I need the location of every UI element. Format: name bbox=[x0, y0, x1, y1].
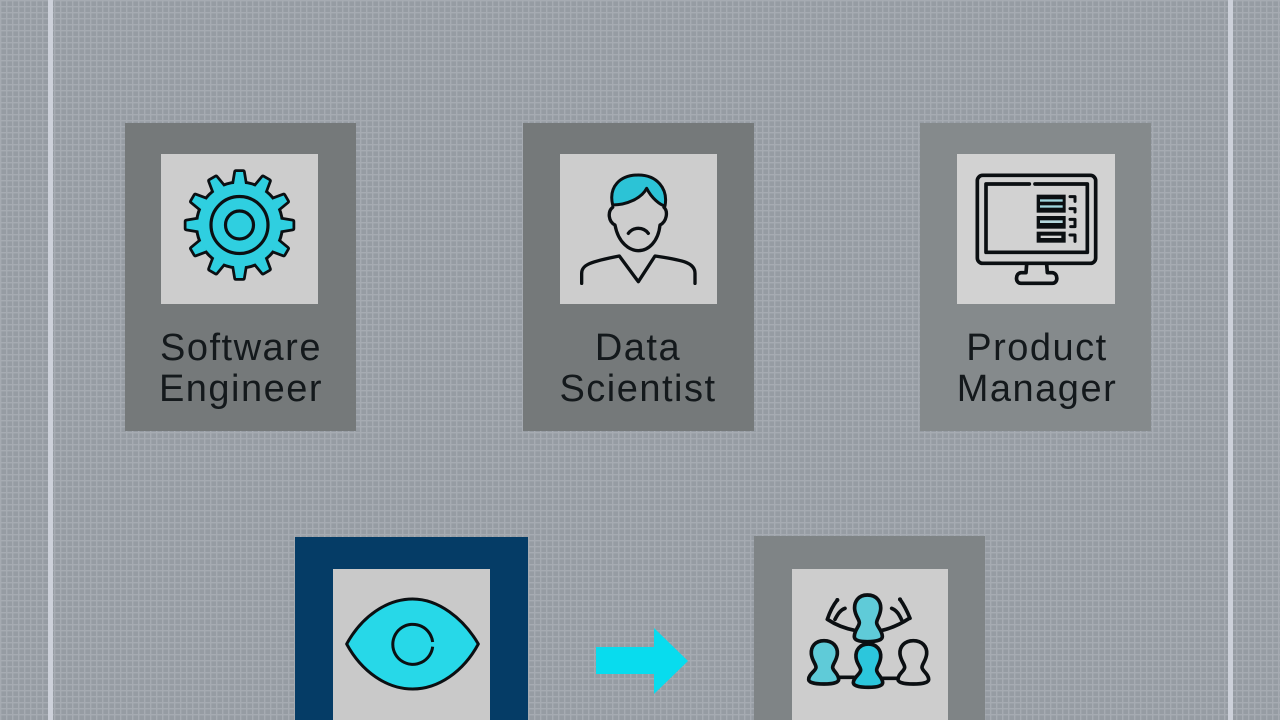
label: Software Engineer bbox=[159, 327, 323, 410]
label: Software Engineer: Software bbox=[160, 327, 322, 369]
icon: monitor bbox=[977, 175, 1096, 283]
label: Product Manager bbox=[957, 327, 1117, 410]
panel: Product Manager bbox=[920, 123, 1151, 431]
label: Software Engineer: Engineer bbox=[159, 368, 323, 410]
panel: Data Scientist bbox=[523, 123, 754, 431]
icon: team bbox=[809, 595, 929, 687]
icon: eye bbox=[347, 599, 478, 689]
label: Data Scientist: Scientist bbox=[559, 368, 717, 410]
panel: team bbox=[754, 536, 985, 720]
icon: gear bbox=[186, 172, 292, 278]
label: Product Manager: Product bbox=[966, 327, 1108, 369]
label: Product Manager: Manager bbox=[957, 368, 1117, 410]
label: Data Scientist bbox=[559, 327, 717, 410]
panel: Software Engineer bbox=[125, 123, 356, 431]
panel: eye (highlighted) bbox=[295, 537, 528, 720]
icon: person bbox=[582, 175, 695, 283]
arrow bbox=[596, 628, 688, 694]
label: Data Scientist: Data bbox=[595, 327, 681, 369]
